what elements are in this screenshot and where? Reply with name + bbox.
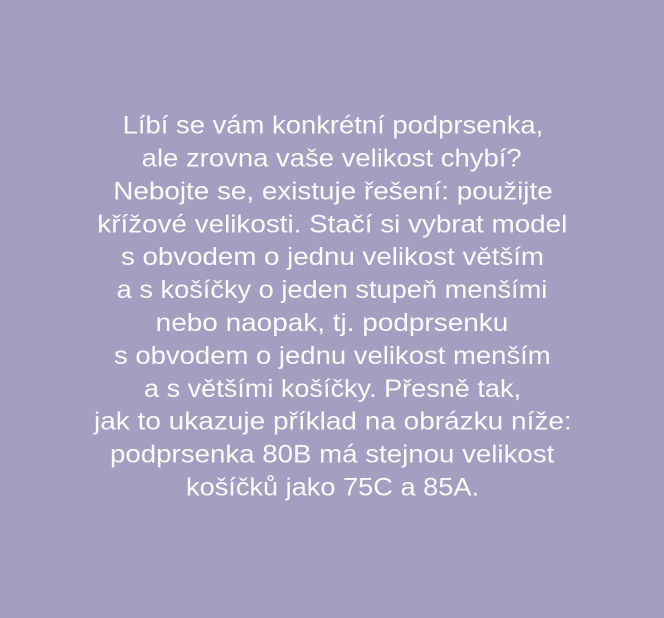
text block: sister sizes explanation: a s košíčky o jeden stupeň menšími [117, 276, 547, 304]
text block: sister sizes explanation: košíčků jako 75C a 85A. [186, 474, 479, 502]
text block: sister sizes explanation: ale zrovna vaše velikost chybí? [142, 144, 522, 172]
text block: sister sizes explanation: a s většími košíčky. Přesně tak, [144, 375, 521, 403]
text block: sister sizes explanation [93, 112, 572, 502]
text block: sister sizes explanation: nebo naopak, tj. podprsenku [156, 309, 508, 337]
text block: sister sizes explanation: s obvodem o jednu velikost větším [121, 243, 544, 271]
text block: sister sizes explanation: Líbí se vám konkrétní podprsenka, [123, 112, 543, 140]
text block: sister sizes explanation: Nebojte se, existuje řešení: použijte [113, 177, 553, 205]
text block: sister sizes explanation: podprsenka 80B má stejnou velikost [110, 441, 554, 469]
text block: sister sizes explanation: s obvodem o jednu velikost menším [114, 342, 551, 370]
text block: sister sizes explanation: jak to ukazuje příklad na obrázku níže: [93, 408, 572, 436]
text block: sister sizes explanation: křížové velikosti. Stačí si vybrat model [97, 210, 567, 238]
